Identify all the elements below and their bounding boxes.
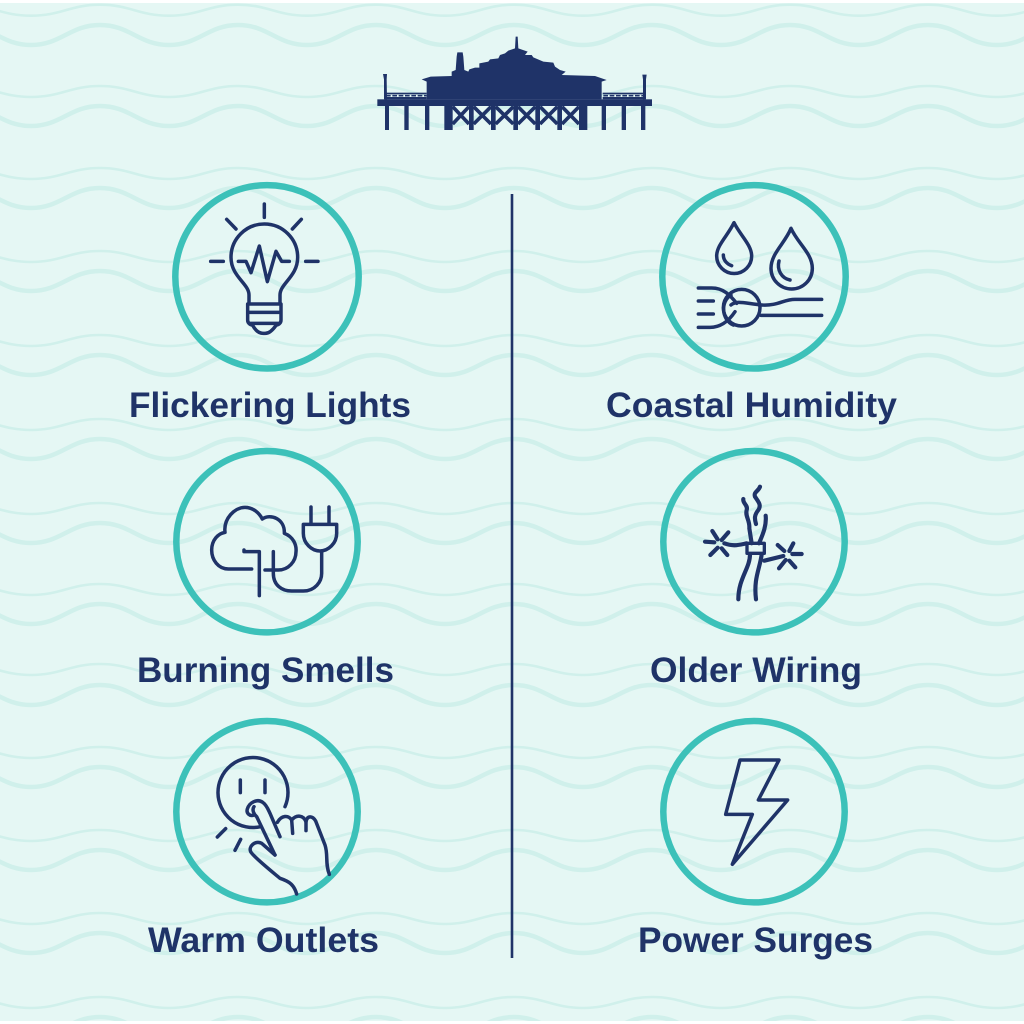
icon ring — [662, 185, 846, 368]
label: Coastal Humidity — [606, 386, 898, 425]
panel: coastal humidity — [606, 185, 898, 425]
icon: smoke cloud and plug — [212, 507, 337, 596]
icon: pier silhouette — [377, 37, 652, 130]
panel: burning smells — [137, 451, 394, 690]
icon ring — [176, 721, 358, 902]
label: Older Wiring — [650, 651, 862, 690]
panel: warm outlets — [148, 721, 379, 960]
label: Flickering Lights — [129, 386, 411, 425]
icon: lightning bolt — [726, 760, 788, 864]
icon ring — [663, 721, 845, 902]
icon: water drops over wire joint — [698, 223, 822, 327]
icon ring — [175, 185, 359, 368]
label: Power Surges — [638, 921, 873, 960]
label: Warm Outlets — [148, 921, 379, 960]
panel: power surges — [638, 721, 873, 960]
icon: light bulb with waveform — [211, 204, 318, 333]
divider line — [511, 194, 513, 958]
panel: flickering lights — [129, 185, 411, 425]
label: Burning Smells — [137, 651, 394, 690]
panel: older wiring — [650, 451, 862, 690]
icon ring — [663, 451, 845, 632]
icon: frayed wires with sparks — [705, 487, 802, 599]
icon: hand touching outlet — [217, 758, 329, 894]
icon ring — [176, 451, 358, 632]
